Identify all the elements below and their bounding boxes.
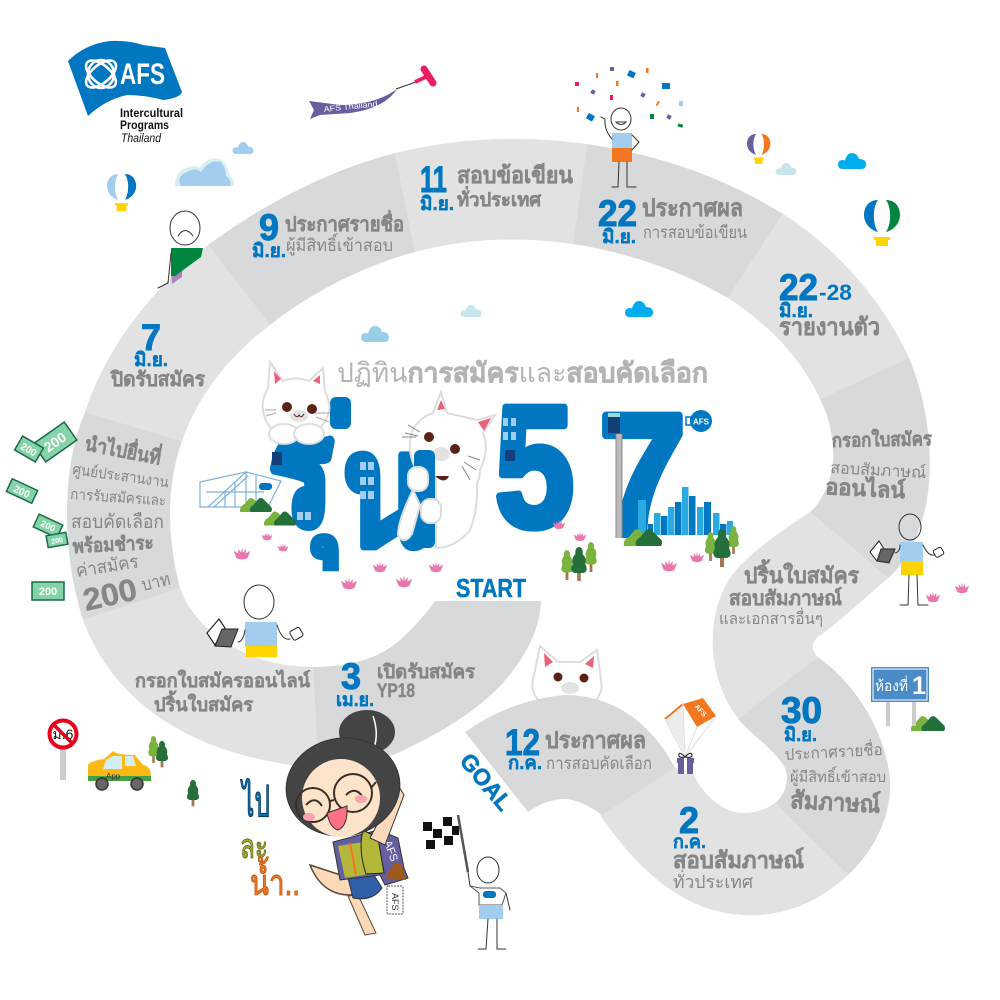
- text: open applications YP18: เปิดรับสมัคร: [377, 662, 476, 683]
- road segment: 3 April, applications open: [313, 601, 541, 768]
- heading: ปฏิทินการสมัครและสอบคัดเลือก: [337, 358, 708, 388]
- text: written exam results: การสอบข้อเขียน: [643, 223, 747, 242]
- girl with backpack jumping: AFS: [390, 893, 400, 911]
- road segment: 22 June, written results: [573, 144, 783, 298]
- logo: AFS Intercultural Programs Thailand: AFS: [120, 58, 165, 91]
- goal label: GOAL: [455, 748, 517, 816]
- AFS badge: [686, 410, 712, 432]
- date: 22-28 June: [779, 267, 852, 322]
- building outline: [200, 472, 281, 507]
- date: 11 June: [420, 159, 454, 215]
- road segment: 2 July, interview: [600, 768, 848, 915]
- big title: generation 57: ร: [271, 389, 331, 554]
- date: 7 June: มิ.ย.: [134, 350, 168, 371]
- text: fill interview form online: ออนไลน์: [825, 473, 906, 503]
- money notes: 200: [39, 586, 57, 598]
- text: announce interview candidates: สัมภาษณ์: [790, 786, 881, 819]
- taxi car: App: [106, 772, 121, 781]
- plane with banner: [309, 69, 433, 119]
- text: selection results: [545, 727, 652, 773]
- lotus flowers: [234, 520, 969, 602]
- money notes: 200: [18, 441, 39, 459]
- road segment: fill online application: [83, 588, 318, 768]
- date: 30 June: 30: [781, 690, 822, 731]
- text: interview nationwide: ทั่วประเทศ: [673, 869, 754, 892]
- text: written exam results: [642, 195, 747, 242]
- person: with checkered flag: [423, 815, 510, 949]
- text: print interview form and documents: สอบสัมภาษณ์: [729, 587, 842, 610]
- date: 3 April: [336, 656, 374, 711]
- text: announce names of exam takers: ประกาศรายชื่อ: [285, 209, 404, 236]
- text: submit and payment: บาท: [139, 569, 172, 595]
- text: open applications YP18: [377, 662, 476, 702]
- sign: no grade 6: ม.6: [53, 726, 74, 742]
- handwritten text: ละ: [240, 828, 268, 866]
- road segment: print interview form: [713, 512, 888, 720]
- cat hugging letter na: [398, 392, 495, 548]
- big title: generation 57: [271, 371, 686, 577]
- balloon: purple and orange: [747, 134, 770, 164]
- date: 2 July: 2: [679, 800, 699, 841]
- text: applications close: ปิดรับสมัคร: [110, 369, 205, 391]
- parachute gift: AFS: [693, 703, 708, 719]
- date: 22-28 June: 22: [779, 267, 818, 308]
- text: announce interview candidates: ประกาศรายชื่อ: [784, 738, 883, 764]
- text: submit and payment: ศูนย์ประสานงาน: [71, 461, 170, 491]
- text: report in: รายงานตัว: [779, 314, 880, 341]
- text: fill online form and print: ปริ้นใบสมัคร: [154, 690, 254, 716]
- road segment: 11 June, written exam: [395, 139, 587, 252]
- text: announce interview candidates: ผู้มีสิทธิ์เข้าสอบ: [790, 766, 886, 786]
- sign: room 1: 1: [912, 672, 926, 700]
- sign: no grade 6: [50, 720, 76, 780]
- date: 11 June: มิ.ย.: [420, 194, 454, 215]
- text: submit and payment: 200: [80, 572, 140, 618]
- text: written exam nationwide: สอบข้อเขียน: [457, 162, 573, 188]
- date: 3 April: เม.ย.: [336, 690, 374, 711]
- text: submit and payment: ค่าสมัคร: [74, 551, 140, 581]
- text: submit and payment: นำไปยื่นที่: [83, 428, 164, 470]
- road segment: online interview form: [810, 358, 933, 578]
- date: 22-28 June: มิ.ย.: [779, 301, 813, 322]
- money notes: [6, 422, 77, 600]
- cat peeking behind goal segment: [532, 646, 602, 712]
- text: selection results: ประกาศผล: [545, 727, 646, 753]
- text: fill online form and print: กรอกใบสมัครออนไลน์: [135, 669, 310, 692]
- money notes: 200: [11, 484, 32, 501]
- text: fill online form and print: [135, 669, 310, 716]
- plane with banner: AFS Thailand: [323, 99, 378, 114]
- handwritten text: น้ำ..: [250, 856, 300, 903]
- date: 12 July: 12: [505, 722, 540, 763]
- money notes: 200: [41, 429, 69, 455]
- text: open applications YP18: YP18: [377, 681, 415, 702]
- text: print interview form and documents: ปริ้นใบสมัคร: [744, 559, 859, 588]
- date: 9 June: [252, 207, 286, 262]
- balloon: blue and green: [864, 200, 900, 246]
- person: with laptop and phone at left: [207, 585, 304, 657]
- date: 9 June: มิ.ย.: [252, 241, 286, 262]
- road segment: 9 June, candidates list: [208, 153, 415, 325]
- date: 2 July: [673, 800, 706, 853]
- start label: START: [456, 573, 526, 603]
- person: sad on road edge: [158, 211, 203, 288]
- text: submit and payment: พร้อมชำระ: [72, 532, 154, 558]
- windows and doors on title letters: [272, 418, 516, 520]
- text: print interview form and documents: และเอกสารอื่นๆ: [719, 607, 823, 628]
- parachute gift: [665, 698, 716, 774]
- text: print interview form and documents: [719, 559, 859, 628]
- text: written exam results: ประกาศผล: [642, 195, 743, 222]
- date: 7 June: 7: [141, 317, 161, 358]
- date: 2 July: ก.ค.: [673, 832, 706, 853]
- road segment: 12 July, final results: [465, 695, 675, 815]
- text: written exam nationwide: ทั่วประเทศ: [457, 186, 542, 211]
- person: celebrating with confetti: [575, 67, 683, 187]
- logo: AFS Intercultural Programs Thailand: Thailand: [121, 133, 162, 145]
- date: 22 June: 22: [598, 193, 637, 234]
- sign: room 1: ห้องที่: [875, 675, 908, 695]
- text: fill interview form online: กรอกใบสมัคร: [832, 427, 933, 452]
- big title: generation 57: น: [343, 404, 429, 577]
- bar chart skyline: [638, 487, 733, 535]
- logo: AFS Intercultural Programs Thailand: Intercultural: [120, 108, 183, 120]
- girl with backpack jumping: AFS: [381, 839, 400, 863]
- text: interview nationwide: สอบสัมภาษณ์: [673, 847, 804, 873]
- date: 22-28 June: -28: [819, 280, 852, 305]
- taxi car: [88, 751, 151, 790]
- date: 9 June: 9: [259, 207, 279, 248]
- text: announce names of exam takers: ผู้มีสิทธิ์เข้าสอบ: [286, 233, 393, 256]
- girl with backpack jumping: [280, 710, 408, 935]
- date: 12 July: ก.ค.: [508, 753, 542, 774]
- road segment: 7 June, applications close: [85, 245, 270, 441]
- text: selection results: การสอบคัดเลือก: [546, 754, 652, 773]
- big title: generation 57: 5: [495, 371, 574, 563]
- road segment: 22-28 June, report in: [728, 214, 909, 399]
- balloon: pale blue and blue: [107, 174, 136, 211]
- date: 11 June: 11: [420, 159, 447, 200]
- handwritten text: [240, 778, 300, 903]
- date: 7 June: [134, 317, 168, 371]
- text: submit and payment: [70, 428, 172, 618]
- big title: generation 57: 7: [599, 379, 686, 571]
- logo: AFS Intercultural Programs Thailand: Programs: [120, 120, 169, 132]
- text: submit and payment: สอบคัดเลือก: [71, 512, 164, 533]
- sign: room 1: [871, 667, 929, 726]
- ladder and door on seven: [608, 413, 622, 538]
- cat on letter ra: [263, 362, 330, 444]
- date: 30 June: มิ.ย.: [784, 725, 817, 746]
- date: 3 April: 3: [341, 656, 361, 697]
- road segment: 30 June, interview list: [738, 657, 890, 875]
- handwritten text: ไป: [240, 778, 270, 825]
- logo: AFS Intercultural Programs Thailand: [68, 41, 183, 145]
- date: 22 June: มิ.ย.: [602, 227, 636, 248]
- big title: generation 57: ุ: [311, 534, 338, 570]
- trees: [148, 526, 739, 806]
- text: fill interview form online: สอบสัมภาษณ์: [830, 458, 927, 482]
- money notes: 200: [51, 537, 64, 546]
- AFS badge: AFS: [693, 418, 710, 426]
- text: announce interview candidates: [784, 738, 886, 819]
- road segment: submit at centre and pay 200 baht: [67, 412, 182, 620]
- bushes: [240, 498, 945, 731]
- text: fill interview form online: [825, 427, 933, 503]
- text: submit and payment: การรับสมัครและ: [70, 486, 167, 510]
- text: announce names of exam takers: [285, 209, 404, 256]
- person: with laptop and phone at right: [870, 514, 944, 605]
- text: interview nationwide: [673, 847, 804, 892]
- clouds: [175, 142, 866, 342]
- money notes: 200: [39, 518, 57, 534]
- text: written exam nationwide: [457, 162, 573, 211]
